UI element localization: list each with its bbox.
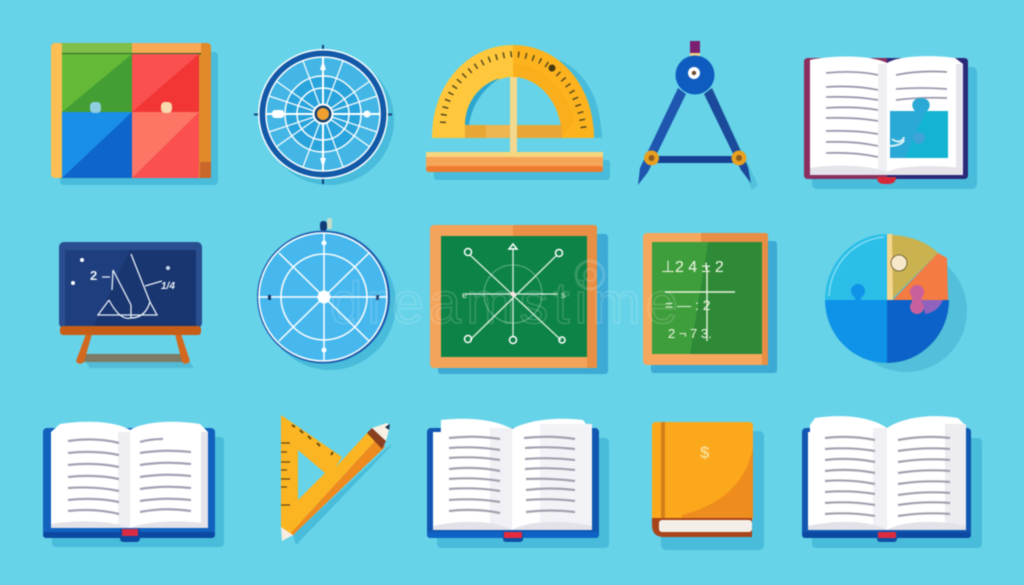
dollar sign on cover: $ (700, 443, 710, 462)
icon: easel blackboard (59, 242, 202, 368)
chalk label: fraction: 1/4 (161, 281, 175, 292)
icon: green chalkboard with numbers (643, 233, 777, 373)
chalk label: right: s (561, 290, 566, 300)
icon: open book with puzzle piece (804, 56, 977, 189)
chalk label: left: e (462, 290, 467, 300)
icon: protractor and ruler (426, 45, 610, 180)
icon: open blue book center (427, 419, 609, 548)
icon: open blue book left (43, 422, 224, 547)
watermark: dreamstime (330, 271, 683, 336)
icon: closed orange book (652, 422, 764, 550)
icon: drafting compass (638, 41, 758, 190)
icon: open blue book right (802, 416, 982, 548)
icon: green chalkboard with diagram (430, 225, 608, 374)
icon: puzzle pie (825, 234, 967, 372)
icon: radial wheel (257, 218, 396, 370)
icon: compass dial (254, 45, 394, 185)
chalk label: 2: 2 (90, 268, 97, 283)
chalk numbers: ⊥2 4 ± 2 (661, 259, 724, 276)
chalk row two: = — : 2 (665, 297, 711, 313)
chalk row three: 2 ¬ 7 3. (668, 326, 712, 341)
icon: colored puzzle frame (51, 43, 218, 185)
icon: set square and pencil (281, 415, 394, 545)
